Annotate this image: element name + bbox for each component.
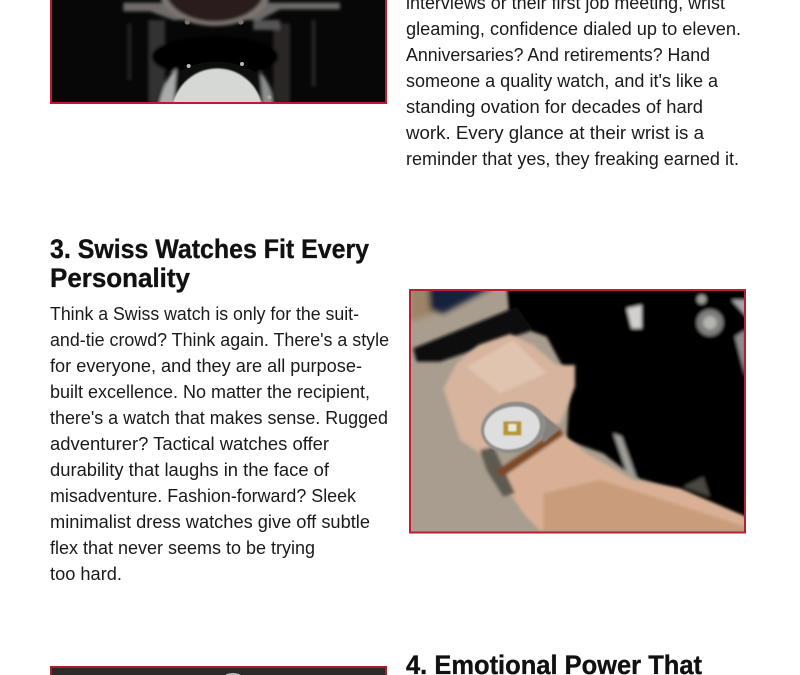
body text: section 3 paragraph: for everyone, and they are all purpose- [50,356,362,376]
body text: gifting occasions paragraph [405,0,741,169]
body text: gifting occasions paragraph: reminder that yes, they freaking earned it. [406,149,739,169]
photo: watch on dark background [50,0,387,104]
photo: wrist with watch on motorcycle [409,283,750,533]
body text: gifting occasions paragraph: someone a quality watch, and it's like a [406,71,719,91]
body text: section 3 paragraph: durability that laughs in the face of [50,460,330,480]
body text: section 3 paragraph: flex that never seems to be trying [50,538,315,558]
body text: gifting occasions paragraph: standing ovation for decades of hard [406,97,703,117]
body text: section 3 paragraph: and-tie crowd? Think again. There's a style [50,330,389,350]
body text: gifting occasions paragraph: gleaming, confidence dialed up to eleven. [406,19,741,39]
body text: section 3 paragraph: minimalist dress watches give off subtle [50,512,370,532]
heading: section 3: Personality [50,263,190,293]
body text: gifting occasions paragraph: work. Every glance at their wrist is a [405,123,705,143]
body text: section 3 paragraph: adventurer? Tactical watches offer [50,434,329,454]
body text: section 3 paragraph: Think a Swiss watch is only for the suit- [50,304,359,324]
body text: section 3 paragraph: too hard. [50,564,122,584]
heading: section 3 [50,234,369,293]
photo: section 4 image top edge [51,667,386,675]
body text: section 3 paragraph: built excellence. No matter the recipient, [50,382,370,402]
body text: gifting occasions paragraph: Anniversaries? And retirements? Hand [406,45,710,65]
body text: section 3 paragraph: misadventure. Fashion-forward? Sleek [50,486,357,506]
body text: section 3 paragraph: there's a watch that makes sense. Rugged [50,408,388,428]
heading: section 3: 3. Swiss Watches Fit Every [50,234,369,264]
body text: section 3 paragraph [50,304,389,584]
